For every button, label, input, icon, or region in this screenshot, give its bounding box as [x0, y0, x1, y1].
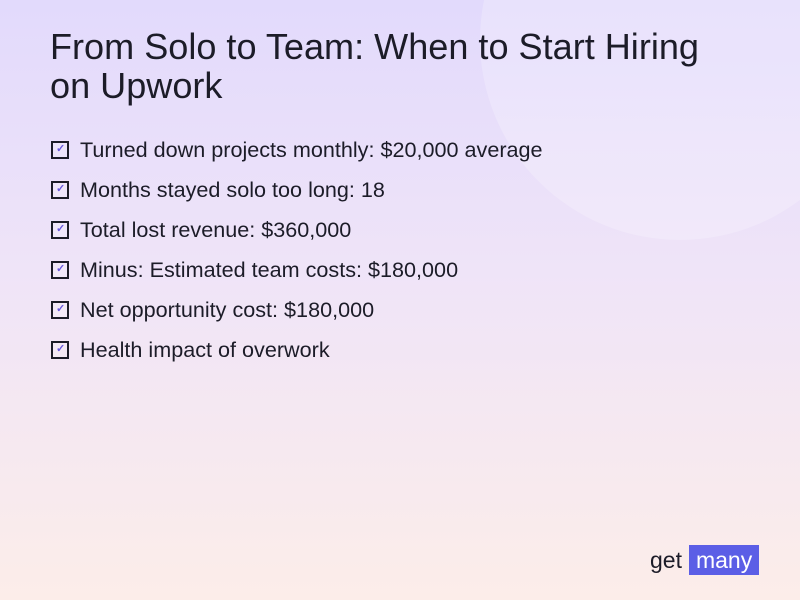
- item 5: Net opportunity cost: $180,000: [80, 297, 374, 322]
- item 1: ✓: [56, 143, 65, 155]
- item 4: ✓: [56, 263, 65, 275]
- item 3: ✓: [56, 223, 65, 235]
- item 2: Months stayed solo too long: 18: [80, 177, 385, 202]
- item 5: ✓: [56, 303, 65, 315]
- item 4: Minus: Estimated team costs: $180,000: [80, 257, 458, 282]
- title: [50, 26, 699, 106]
- logo: get: [650, 546, 682, 572]
- checklist: [51, 137, 543, 362]
- item 6: ✓: [56, 343, 65, 355]
- item 2: ✓: [56, 183, 65, 195]
- item 1: Turned down projects monthly: $20,000 average: [80, 137, 543, 162]
- item 6: Health impact of overwork: [80, 337, 330, 362]
- title: on Upwork: [50, 65, 222, 106]
- logo: many: [696, 547, 752, 573]
- title: From Solo to Team: When to Start Hiring: [50, 26, 699, 67]
- logo: [650, 545, 759, 575]
- item 3: Total lost revenue: $360,000: [80, 217, 351, 242]
